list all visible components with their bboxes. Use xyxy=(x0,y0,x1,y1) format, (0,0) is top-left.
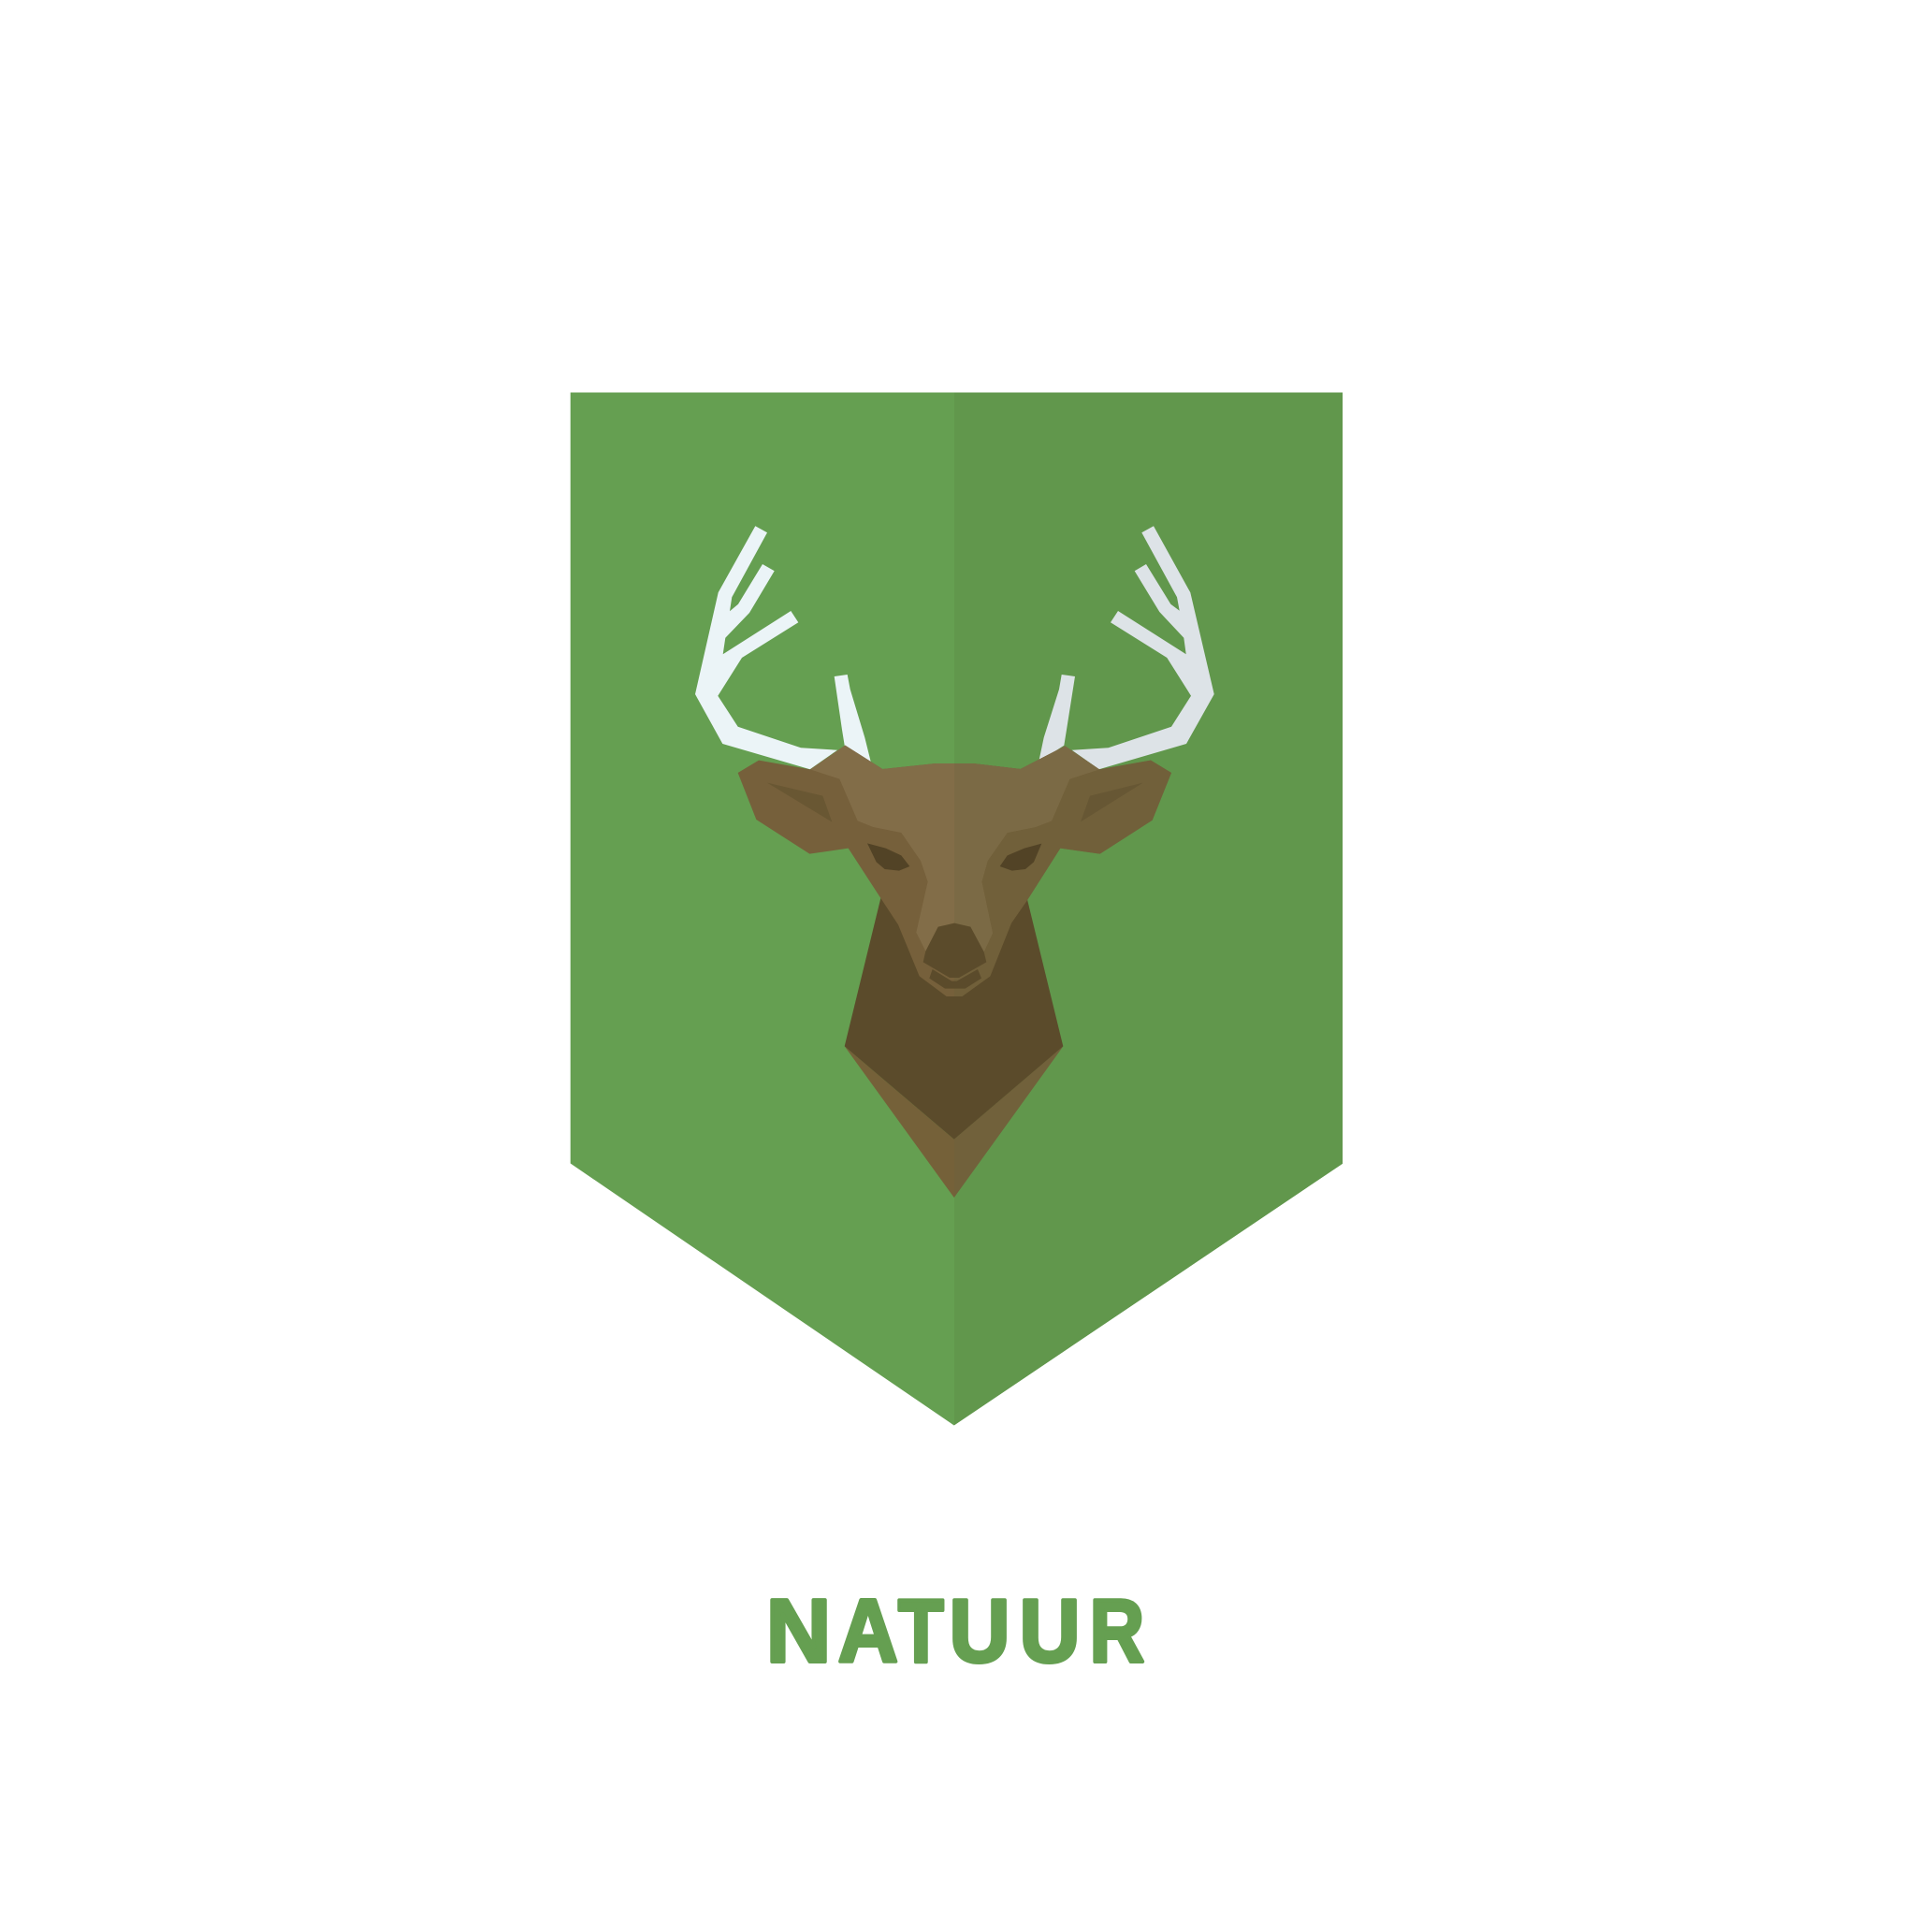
forehead and muzzle xyxy=(810,746,1099,966)
chest xyxy=(845,1046,1063,1198)
mouth xyxy=(929,969,981,989)
right ear inner xyxy=(1081,783,1143,821)
left antler xyxy=(695,526,871,769)
title: A xyxy=(838,1580,898,1681)
title: N xyxy=(766,1581,831,1681)
title: T xyxy=(898,1580,944,1681)
title xyxy=(766,1580,1144,1681)
left eye xyxy=(867,843,909,871)
neck xyxy=(845,884,1063,1140)
title: U xyxy=(1020,1580,1080,1681)
title: R xyxy=(1090,1581,1144,1681)
left ear inner xyxy=(767,783,832,822)
title: U xyxy=(950,1580,1010,1681)
head base xyxy=(738,746,1171,996)
panel: green shield xyxy=(571,393,1343,1426)
nose xyxy=(923,923,986,978)
icon: deer head xyxy=(695,526,1214,1198)
right eye xyxy=(1000,844,1041,871)
right antler xyxy=(1039,526,1214,769)
